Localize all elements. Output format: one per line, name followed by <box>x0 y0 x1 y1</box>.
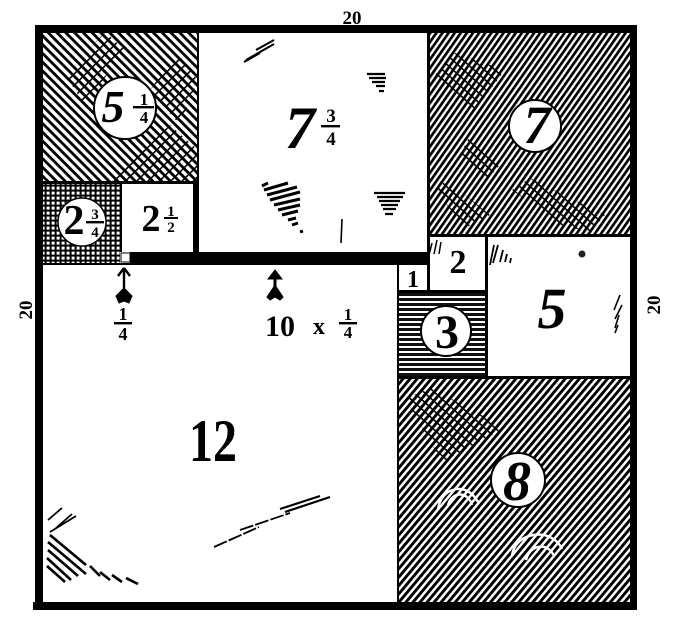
label: 10 x 1/4 <box>265 305 357 343</box>
label: 10 x 1/4: 1 <box>344 305 352 324</box>
panel: 2 3/4 mesh: 4 <box>91 225 99 241</box>
panel: 7 3/4: 4 <box>326 129 336 150</box>
panel: 7 hatched <box>429 33 630 235</box>
panel: 5: 5 <box>538 276 566 341</box>
panel: 5 1/4 hatched <box>42 32 198 182</box>
panel: 2 3/4 mesh: 3 <box>91 207 99 223</box>
label: 1/4 under small arrow: 4 <box>118 324 128 344</box>
label: 1/4 under small arrow <box>114 304 132 344</box>
panel: 2 3/4 mesh: 2 <box>64 198 84 244</box>
arrow: pointing to small square <box>116 268 132 303</box>
dimension label: right 20: 20 <box>644 296 665 314</box>
label: 5 1/4: 4 <box>140 108 149 127</box>
black bar: 10 x 1/4 <box>130 252 428 265</box>
label: 10 x 1/4: 4 <box>344 323 353 342</box>
panel: 7 3/4: 7 <box>285 95 317 161</box>
small white square: 1/4 <box>121 253 130 262</box>
panel: 7 hatched: 7 <box>524 95 552 155</box>
dimension label: top 20: 20 <box>342 8 362 29</box>
panel: 7 3/4: 3 <box>326 106 336 127</box>
panel: 3 horizontal lines <box>399 292 487 376</box>
dimension label: left 20: 20 <box>16 300 37 320</box>
panel: 2 1/2: 2 <box>167 220 175 236</box>
panel: 2 3/4 mesh <box>42 182 120 263</box>
panel: 12 <box>42 265 396 602</box>
panel: 5 <box>488 237 630 376</box>
panel: 2 1/2 <box>121 185 194 250</box>
panel: 2: 2 <box>450 244 466 281</box>
label: 5 1/4 <box>102 81 154 132</box>
label: 5 1/4: 5 <box>102 81 124 132</box>
panel: 12: 12 <box>189 408 237 474</box>
panel: small square 1 <box>399 266 428 293</box>
panel: 3 horizontal lines: 3 <box>435 306 459 359</box>
panel: 8 hatched <box>398 378 630 602</box>
panel: 2 1/2: 1 <box>167 204 175 220</box>
label: 10 x 1/4: 10 <box>265 310 295 343</box>
panel: 7 3/4 <box>198 33 428 252</box>
panel: 2 1/2: 2 <box>142 198 160 240</box>
panel: small square 1: 1 <box>407 267 419 293</box>
label: 10 x 1/4: x <box>313 314 325 340</box>
arrow: pointing to black bar <box>267 270 283 300</box>
label: 1/4 under small arrow: 1 <box>118 304 128 324</box>
label: 5 1/4: 1 <box>140 90 148 109</box>
panel: 2 <box>429 236 487 290</box>
panel: 8 hatched: 8 <box>503 451 531 513</box>
